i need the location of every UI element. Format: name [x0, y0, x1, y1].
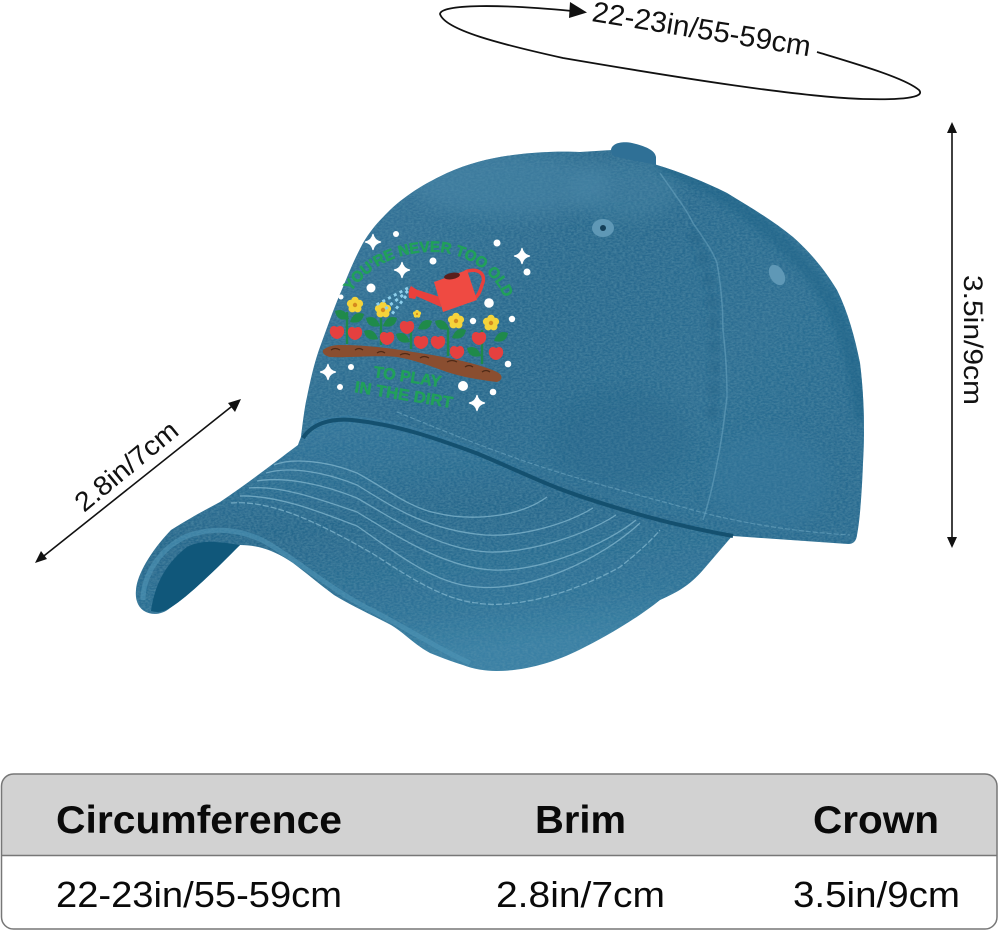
value: crown: 3.5in/9cm [793, 874, 960, 915]
sweatband seam [303, 420, 733, 536]
eyelet: front [592, 219, 614, 237]
slogan: in the dirt: IN THE DIRT [353, 379, 454, 412]
crown measurement: vertical arrow: 3.5in/9cm [958, 275, 988, 405]
value: circumference: 22-23in/55-59cm [56, 874, 342, 915]
eyelet: side [765, 262, 789, 288]
brim top [136, 405, 733, 671]
value: brim: 2.8in/7cm [496, 874, 665, 915]
header: brim: Brim [535, 799, 626, 842]
stars and dots [320, 231, 530, 411]
cap button [611, 142, 656, 165]
plants [330, 297, 508, 364]
brim measurement: diagonal arrow [35, 399, 241, 563]
header: crown: Crown [813, 799, 939, 842]
crown measurement: vertical arrow [947, 122, 988, 548]
curved slogan: YOU'RE NEVER TOO OLD [342, 241, 512, 296]
table outline [2, 774, 997, 929]
size table [1, 774, 997, 929]
brim measurement: diagonal arrow: 2.8in/7cm [69, 415, 184, 518]
soil [323, 345, 502, 382]
circumference measurement: elliptical arrow [440, 0, 920, 99]
baseball cap illustration [136, 142, 864, 671]
slogan: to play: TO PLAY [372, 364, 443, 391]
brim edge highlight [143, 530, 470, 663]
brim underside [151, 542, 240, 612]
side panel seam [660, 173, 727, 520]
cap crown [300, 150, 864, 544]
header: circumference: Circumference [56, 799, 342, 842]
brim stitching [231, 461, 660, 604]
table header band [2, 774, 997, 855]
water droplets [376, 288, 408, 314]
watering can [409, 270, 483, 312]
printed design: gardening graphic [320, 231, 530, 412]
